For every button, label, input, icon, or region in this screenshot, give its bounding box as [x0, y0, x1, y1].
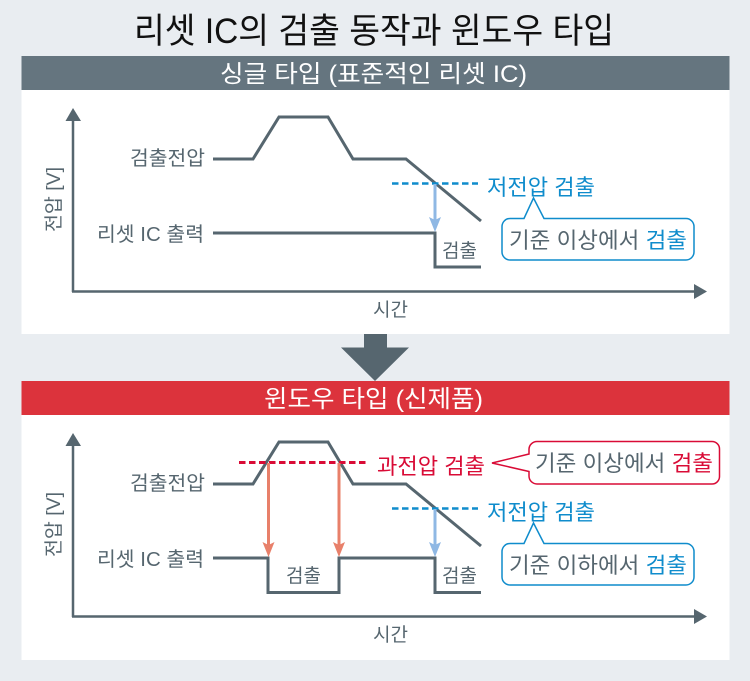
label: detected: 검출 — [442, 240, 477, 262]
low voltage threshold line — [392, 182, 478, 185]
header: window type: 윈도우 타입 (신제품) — [264, 386, 483, 413]
label: detection voltage: 검출전압 — [130, 147, 205, 170]
reset output trace — [213, 558, 481, 592]
low voltage detection arrow — [429, 184, 441, 232]
label: detected (low voltage): 검출 — [442, 565, 477, 587]
over voltage threshold line — [239, 461, 368, 464]
reset output trace — [213, 233, 481, 267]
panel: single type — [22, 56, 730, 334]
header: window type — [22, 381, 730, 415]
label: low voltage detection: 저전압 검출 — [487, 500, 595, 525]
label: reset IC output: 리셋 IC 출력 — [97, 223, 204, 246]
callout: below threshold: 기준 이하에서 검출 — [509, 553, 687, 578]
over voltage detection arrow 1 — [262, 463, 274, 557]
voltage trace — [213, 117, 481, 221]
y axis label: 전압 [V] — [43, 167, 65, 232]
callout: above threshold — [502, 198, 694, 260]
y axis with arrow — [66, 433, 81, 617]
panel background — [22, 415, 730, 660]
over voltage detection arrow 2 — [333, 463, 345, 557]
header: single type — [22, 56, 730, 90]
x axis label: 시간 — [373, 299, 408, 321]
low voltage detection arrow — [429, 509, 441, 557]
title: 리셋 IC의 검출 동작과 윈도우 타입 — [134, 12, 614, 51]
label: detected (over voltage): 검출 — [286, 565, 321, 587]
panel background — [22, 90, 730, 334]
label: over voltage detection: 과전압 검출 — [377, 454, 485, 479]
label: detection voltage: 검출전압 — [130, 472, 205, 495]
header: single type: 싱글 타입 (표준적인 리셋 IC) — [220, 61, 527, 88]
callout: above threshold — [492, 442, 720, 484]
voltage trace — [213, 442, 481, 546]
arrow: transition — [341, 334, 409, 381]
y axis label: 전압 [V] — [43, 492, 65, 557]
x axis with arrow — [72, 609, 707, 624]
low voltage threshold line — [392, 507, 478, 510]
callout: below threshold — [502, 523, 694, 585]
callout: above threshold: 기준 이상에서 검출 — [509, 228, 687, 253]
x axis label: 시간 — [373, 624, 408, 646]
panel: window type — [22, 381, 730, 660]
y axis with arrow — [66, 108, 81, 292]
label: reset IC output: 리셋 IC 출력 — [97, 548, 204, 571]
x axis with arrow — [72, 284, 707, 299]
callout: above threshold: 기준 이상에서 검출 — [535, 451, 713, 476]
label: low voltage detection: 저전압 검출 — [487, 175, 595, 200]
